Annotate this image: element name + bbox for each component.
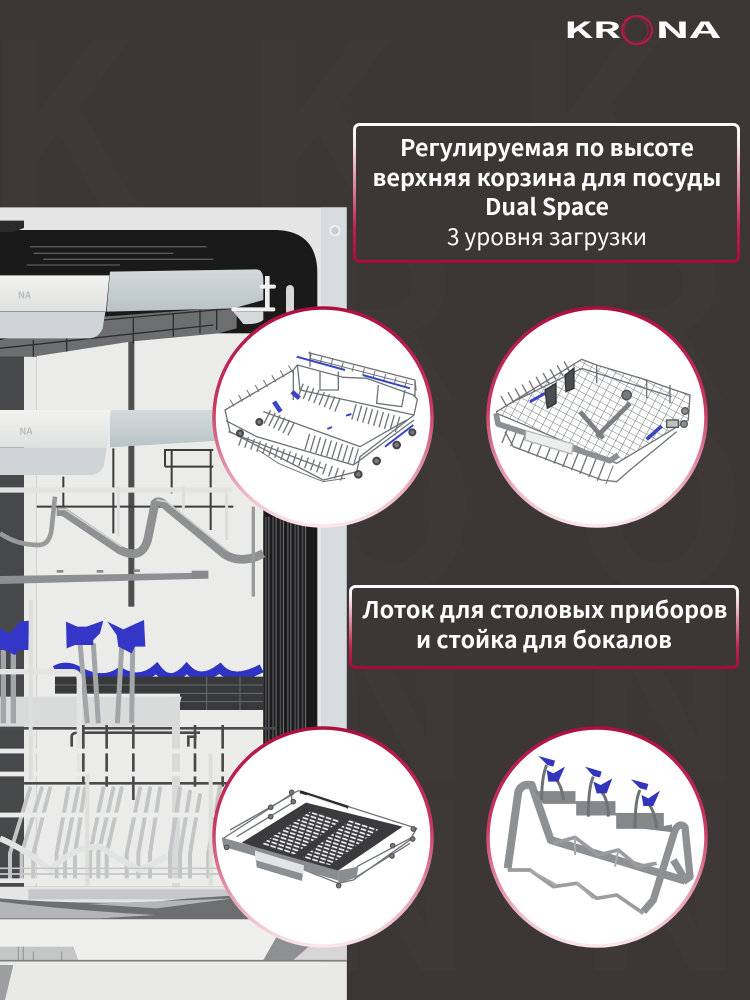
watermark letters: O	[571, 324, 749, 657]
watermark letters: R	[572, 134, 728, 467]
dark wire rack	[0, 725, 277, 800]
callout heading: верхняя корзина для посуды	[372, 159, 722, 193]
back wall	[37, 333, 263, 887]
callout text: Лоток для столовых приборов	[361, 591, 728, 625]
icon: wire basket with cutlery handle	[496, 359, 690, 482]
callout heading: Dual Space	[485, 188, 609, 222]
blue holders	[538, 756, 660, 806]
white horizontal rails	[0, 751, 260, 881]
icon: blue clips	[274, 357, 413, 447]
icon: blue clips	[530, 393, 662, 439]
icon: wire basket	[225, 352, 417, 482]
door seam	[0, 958, 347, 963]
blue holder centre	[66, 621, 103, 723]
white uprights	[31, 600, 211, 887]
callout: cutlery tray and glass rack	[350, 586, 738, 668]
callout text	[361, 591, 728, 655]
circle: cutlery tray	[214, 728, 432, 946]
right door post	[321, 207, 347, 1000]
base rods	[0, 868, 223, 874]
watermark letters: O	[301, 324, 479, 657]
lower handle panel	[0, 410, 111, 447]
logo KRONA: NA	[655, 13, 722, 45]
stem panel	[0, 697, 182, 727]
hinge	[0, 947, 78, 960]
tub reflection	[0, 895, 253, 919]
dark cavity	[0, 230, 317, 887]
callout heading: Регулируемая по высоте	[400, 129, 694, 163]
rack stems	[542, 765, 657, 828]
inner door	[0, 919, 347, 961]
upper rail hook	[233, 276, 294, 324]
rack frame	[508, 785, 685, 881]
watermark letters: N	[304, 514, 476, 847]
lower rail arm	[110, 410, 220, 447]
circle: upper basket low	[214, 308, 432, 526]
hinge seams	[18, 947, 62, 960]
rack top plate	[535, 792, 672, 832]
icon: right fittings	[667, 408, 688, 427]
icon: wheels	[237, 419, 415, 478]
icon: handle	[525, 431, 573, 454]
callout text: и стойка для бокалов	[416, 621, 672, 655]
top latch	[0, 221, 24, 232]
callout heading	[372, 129, 722, 222]
middle bar	[0, 573, 208, 584]
watermark letters: R	[302, 134, 458, 467]
icon: tray handle	[255, 851, 304, 881]
blue holder right	[107, 620, 145, 723]
watermark letters: N	[574, 514, 746, 847]
blue cup rail	[55, 667, 262, 677]
upper rail arm	[107, 269, 263, 312]
door clip	[0, 965, 13, 1000]
door corner shadow	[263, 937, 347, 960]
rack right leg	[643, 825, 690, 912]
dishwasher photo	[0, 207, 347, 1000]
callout: upper basket	[354, 124, 738, 262]
icon: front grey bar	[496, 413, 618, 461]
blue holder left	[0, 621, 29, 723]
corner highlight	[293, 940, 347, 960]
cup shelf highlight	[58, 500, 227, 550]
icon: tray fittings	[224, 790, 416, 888]
curved lower wire	[0, 838, 167, 870]
upper rail rack	[0, 307, 237, 357]
door band	[0, 962, 347, 1000]
tall tine	[164, 697, 188, 887]
lower handle lower	[0, 448, 107, 475]
rack struts	[0, 307, 233, 357]
icon: dark fold rack	[545, 368, 574, 408]
plate tines	[10, 787, 220, 880]
cup shelf left	[0, 497, 55, 545]
logo KRONA	[564, 13, 722, 45]
icon: cutlery tray	[222, 790, 417, 888]
circle: glass rack	[488, 728, 706, 946]
grid lines	[55, 677, 263, 710]
upper handle panel	[0, 275, 109, 312]
callout subheading: 3 уровня загрузки	[447, 218, 647, 252]
icon: glass rack	[508, 756, 690, 913]
circle: upper basket high	[488, 308, 706, 526]
cavity reflections	[27, 247, 213, 265]
upper handle logo: NA	[18, 288, 31, 302]
bar clips	[57, 569, 208, 579]
lower handle logo: NA	[19, 424, 32, 438]
dark holder grid	[55, 677, 263, 710]
reflection highlight	[0, 898, 233, 918]
rack wave wires	[508, 837, 657, 913]
white rack upright	[0, 672, 79, 780]
white top rod	[0, 482, 232, 498]
vertical rods	[118, 487, 227, 540]
upper handle lower	[0, 312, 105, 338]
appliance frame	[0, 207, 347, 1000]
floor strip	[28, 889, 255, 899]
icon: centre bracket	[580, 403, 630, 438]
back wall pole	[128, 340, 134, 607]
dark rack behind	[37, 448, 233, 533]
left white strip	[24, 357, 37, 887]
cup shelf main	[57, 502, 263, 559]
side rod	[248, 507, 258, 597]
right cavity stripes	[263, 517, 307, 857]
screw	[330, 226, 340, 235]
logo KRONA: KR	[564, 13, 621, 45]
left column	[0, 357, 24, 887]
